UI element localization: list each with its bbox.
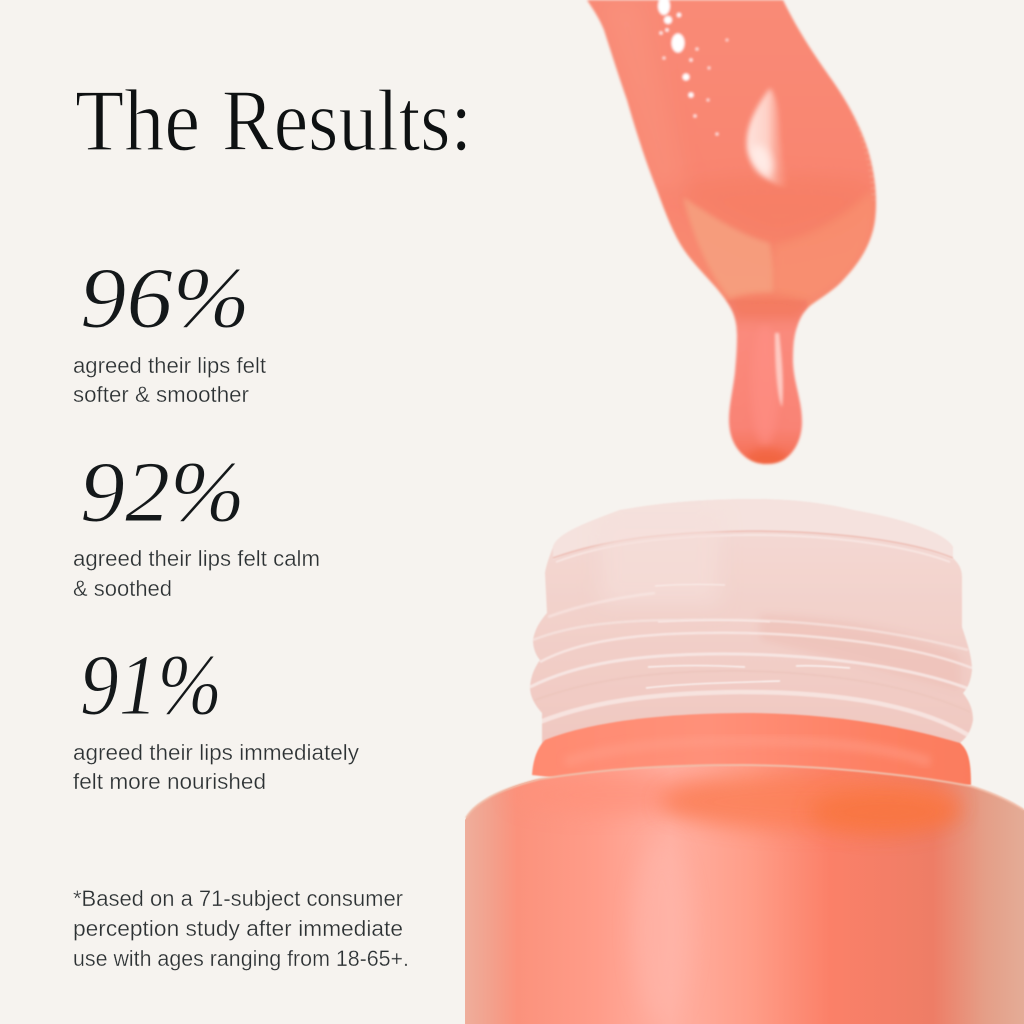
stem highlight: [775, 333, 783, 407]
bottle shoulder highlight: [466, 765, 1024, 818]
stat description: softer and smoother: softer & smoother: [73, 382, 249, 407]
illustration: gloss drip: [580, 0, 880, 470]
stat description: calm and soothed: agreed their lips felt calm: [73, 546, 320, 571]
title: The: [75, 73, 200, 170]
stat value: 96%: 96%: [80, 249, 250, 346]
stat description: more nourished: [73, 740, 359, 794]
footnote: [73, 886, 409, 971]
illustration: bottle: [460, 495, 1024, 1024]
frosted bottle body: [460, 755, 1024, 1024]
stat value: 92%: 92%: [80, 443, 245, 540]
footnote: use with ages ranging from 18-65+.: [73, 946, 409, 971]
highlight core: [747, 142, 777, 178]
stat block: 96%: [73, 249, 266, 407]
stat description: softer and smoother: [73, 353, 266, 407]
title: [75, 73, 472, 170]
footnote: perception study after immediate: [73, 916, 403, 941]
orange collar: [532, 713, 971, 800]
stat description: calm and soothed: & soothed: [73, 576, 172, 601]
stat description: calm and soothed: [73, 546, 320, 601]
stat description: softer and smoother: agreed their lips felt: [73, 353, 266, 378]
stat block: 91%: [73, 636, 359, 794]
bottle neck with threads: [530, 499, 974, 744]
glossy highlight on drip: [747, 88, 788, 188]
stat description: more nourished: agreed their lips immediately: [73, 740, 359, 765]
collar highlight: [565, 741, 930, 762]
stat value: 91%: 91%: [80, 636, 222, 733]
title: Results:: [222, 73, 472, 170]
stat block: 92%: [73, 443, 320, 601]
footnote: *Based on a 71-subject consumer: [73, 886, 403, 911]
sparkle highlights: [658, 0, 728, 135]
stat description: more nourished: felt more nourished: [73, 769, 266, 794]
